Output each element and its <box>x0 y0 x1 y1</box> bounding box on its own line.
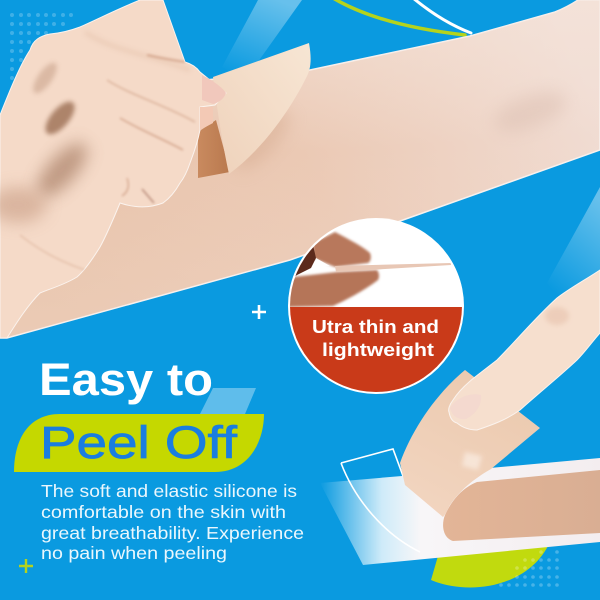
body text <box>41 481 304 563</box>
green half moon <box>431 546 548 588</box>
hand pinching the patch <box>0 0 226 338</box>
forearm <box>0 0 600 338</box>
forearm highlight <box>0 0 600 338</box>
tan silicone strip on sheet <box>443 470 600 541</box>
fingertip below nail <box>200 107 213 130</box>
callout text: Utra thin and <box>312 316 439 337</box>
callout white disc <box>288 218 464 394</box>
product: backing sheet and silicone strip <box>320 370 600 565</box>
plus icon: white <box>252 305 266 319</box>
dot pattern: top left <box>10 13 73 80</box>
top curved green and white lines <box>333 0 471 35</box>
callout photo <box>290 230 462 392</box>
heading: Easy to: Easy to <box>39 354 213 405</box>
fingernail <box>450 394 481 419</box>
body text: great breathability. Experience <box>41 523 304 543</box>
shadow under patch <box>226 102 298 178</box>
fingernail <box>202 75 226 104</box>
green badge shape <box>14 414 264 472</box>
dot pattern: bottom right <box>499 550 559 587</box>
callout text <box>312 316 439 360</box>
decorative translucent stripes <box>200 0 600 414</box>
forearm base <box>0 0 600 338</box>
patch top side <box>213 43 311 174</box>
finger body <box>449 270 600 430</box>
white backing sheet <box>320 458 600 565</box>
knuckle <box>545 307 569 325</box>
round callout: ultra thin <box>288 218 464 397</box>
texture highlight <box>462 452 482 470</box>
finger pressing the strip <box>449 270 600 430</box>
body text: comfortable on the skin with <box>41 502 286 522</box>
callout text: lightweight <box>322 339 434 360</box>
patch underside <box>198 120 230 178</box>
plus icon: green <box>19 559 33 573</box>
badge text: Peel Off <box>40 417 238 468</box>
peeled silicone strip <box>400 370 540 517</box>
wrist shading <box>489 84 571 140</box>
silicone patch lifted from arm <box>198 43 311 178</box>
hand shading <box>0 32 195 270</box>
body text: The soft and elastic silicone is <box>41 481 297 501</box>
body text: no pain when peeling <box>41 543 227 563</box>
heading badge: Peel Off <box>14 414 264 472</box>
white outline arc <box>341 449 420 552</box>
hand base <box>0 0 226 338</box>
